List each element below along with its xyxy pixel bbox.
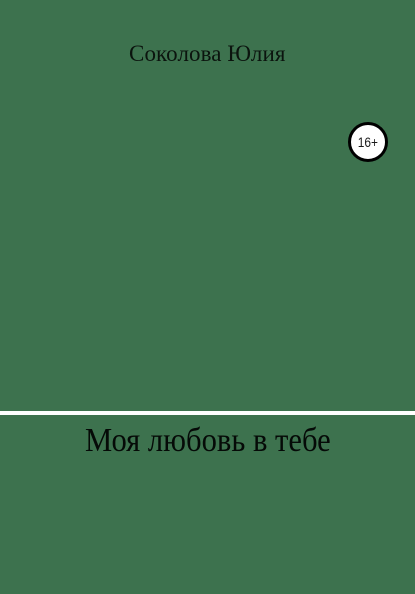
- age rating badge 16+: [348, 122, 388, 162]
- book title: Моя любовь в тебе: [85, 422, 331, 459]
- white divider line: [0, 411, 415, 415]
- author name: Соколова Юлия: [129, 41, 286, 66]
- age rating badge 16+: 16+: [358, 134, 378, 150]
